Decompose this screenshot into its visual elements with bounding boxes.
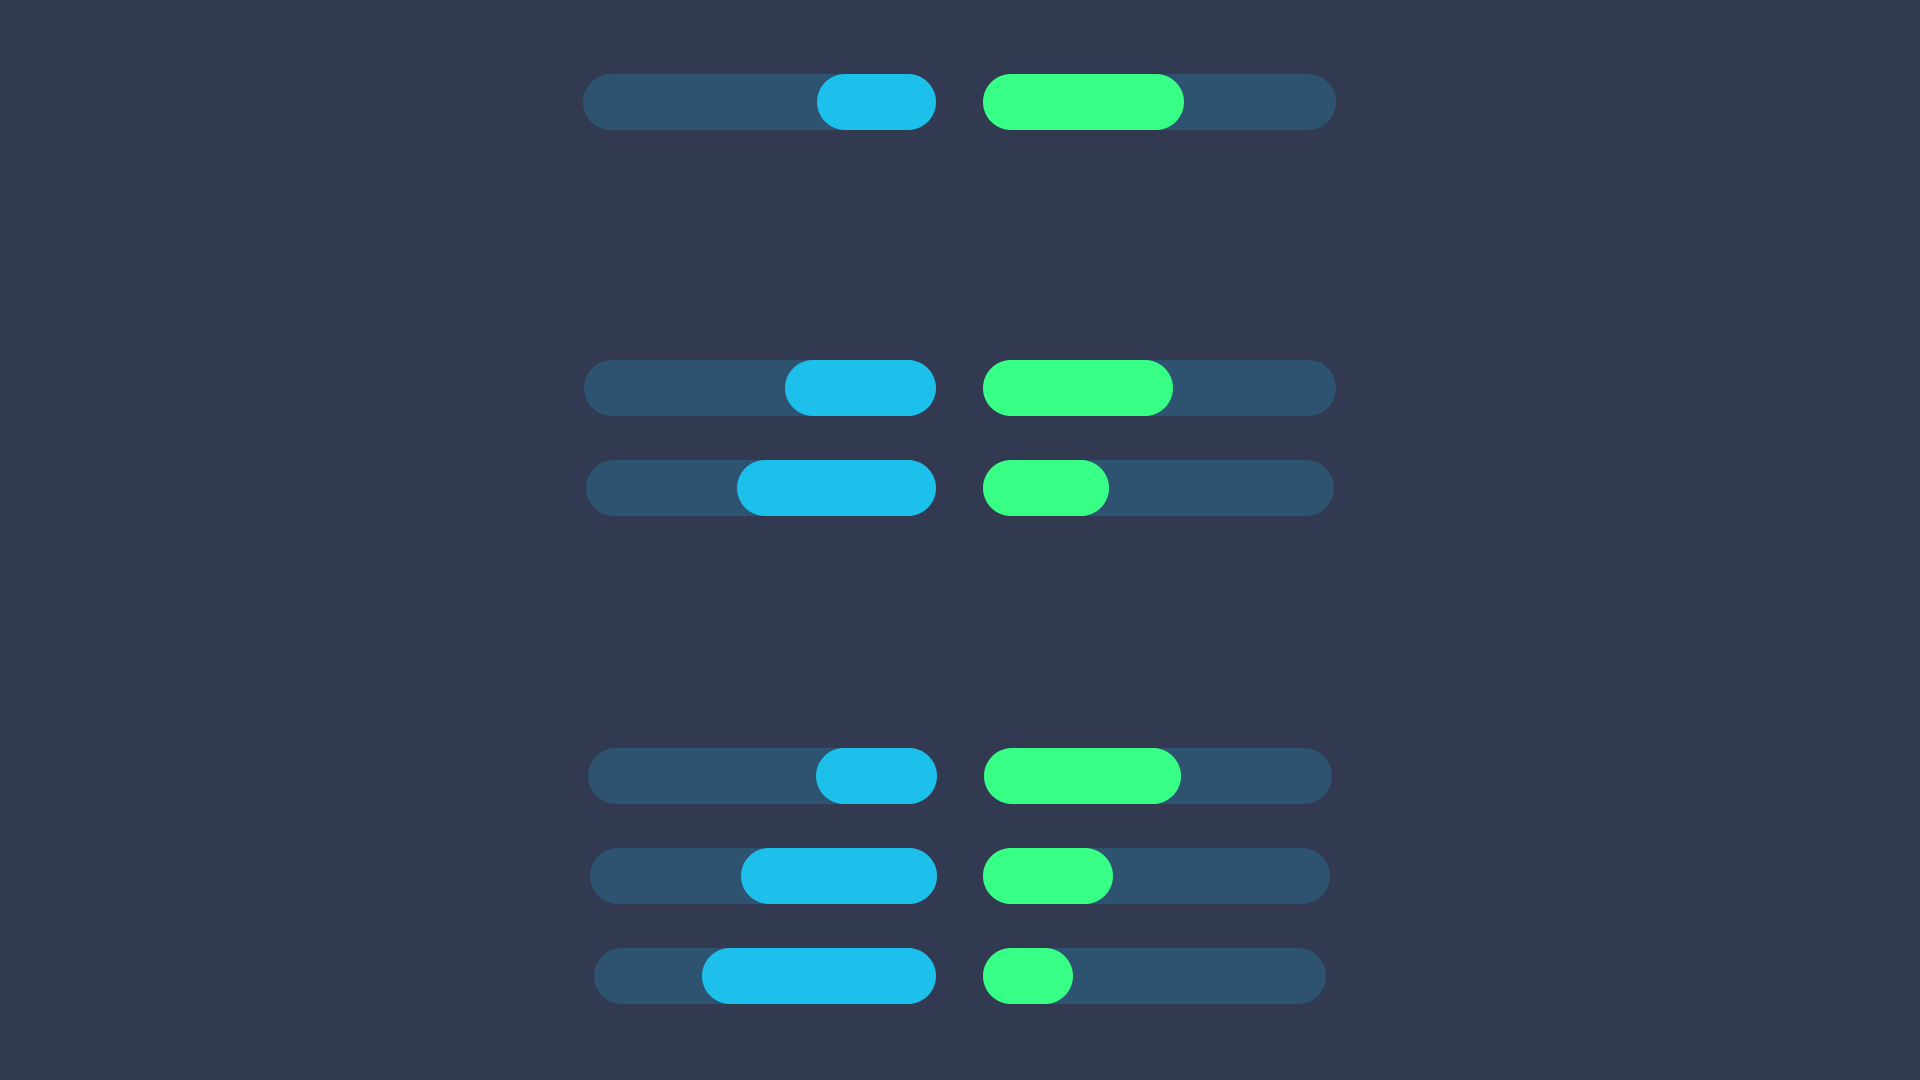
right track — [984, 748, 1332, 804]
blue bar — [785, 360, 936, 416]
green bar — [984, 748, 1181, 804]
green bar — [983, 74, 1184, 130]
row 4 — [588, 748, 1332, 804]
right track — [983, 360, 1336, 416]
green bar — [983, 460, 1109, 516]
right track — [983, 948, 1326, 1004]
row 2 — [584, 360, 1336, 416]
left track — [586, 460, 936, 516]
row 5 — [590, 848, 1330, 904]
green bar — [983, 948, 1073, 1004]
row 6 — [594, 948, 1326, 1004]
right track — [983, 74, 1336, 130]
blue bar — [817, 74, 936, 130]
blue bar — [702, 948, 936, 1004]
left track — [583, 74, 936, 130]
row 3 — [586, 460, 1334, 516]
right track — [983, 848, 1330, 904]
left track — [584, 360, 936, 416]
blue bar — [816, 748, 936, 804]
left track — [588, 748, 936, 804]
blue bar — [741, 848, 937, 904]
left track — [594, 948, 936, 1004]
green bar — [983, 848, 1113, 904]
right track — [983, 460, 1334, 516]
blue bar — [737, 460, 936, 516]
left track — [590, 848, 936, 904]
row 1 — [583, 74, 1336, 130]
green bar — [983, 360, 1173, 416]
